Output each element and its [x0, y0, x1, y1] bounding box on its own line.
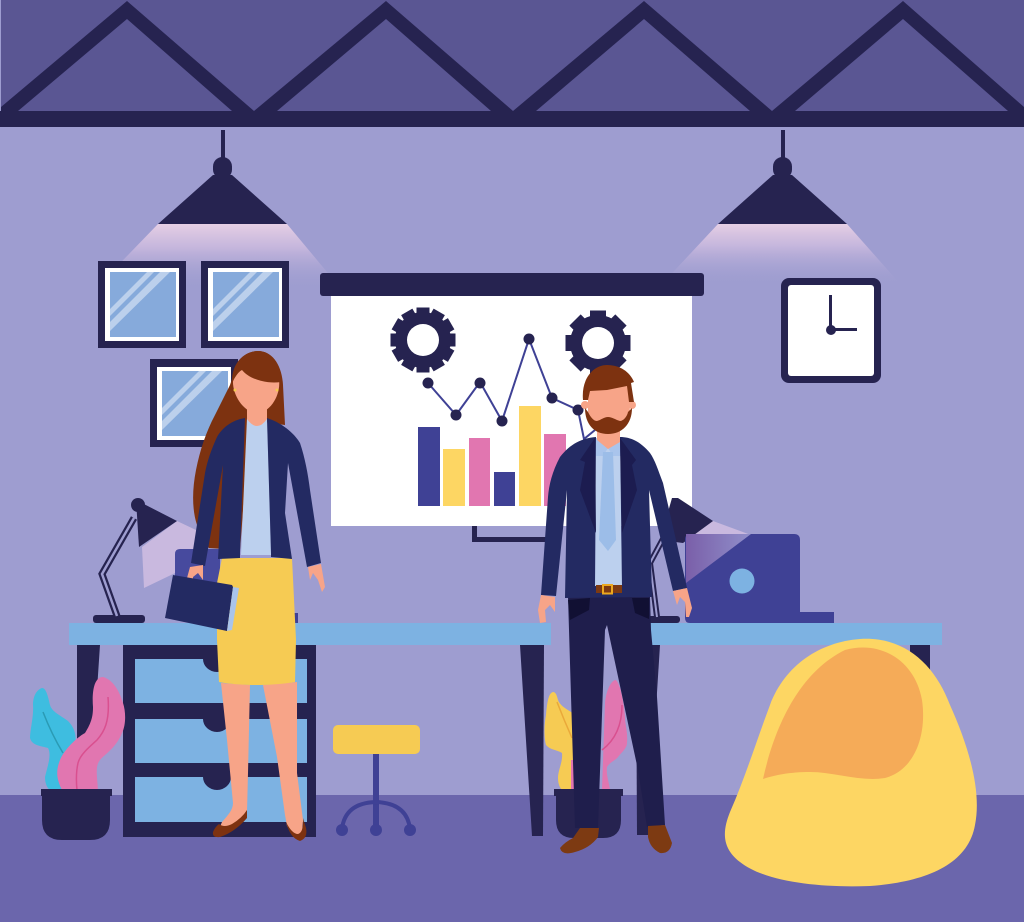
gear: right [566, 310, 630, 376]
drawers [123, 645, 316, 837]
ears [581, 401, 589, 409]
tie [599, 452, 616, 551]
plant: left [30, 677, 125, 840]
shoes [560, 828, 599, 853]
lapels [580, 438, 637, 533]
blouse [241, 418, 271, 555]
hand: right [308, 564, 325, 592]
floor [0, 795, 1024, 922]
earrings [234, 388, 236, 392]
shoes [213, 810, 247, 837]
desk: right [636, 623, 942, 835]
desk: left [69, 623, 551, 836]
plant: right [544, 680, 627, 838]
pockets [568, 598, 649, 620]
ceiling lamp: right [662, 130, 902, 286]
picture frame: top right [201, 261, 289, 348]
neck [597, 425, 620, 449]
woman [165, 351, 325, 841]
face [233, 366, 279, 413]
folder [165, 575, 233, 631]
trousers [568, 597, 665, 828]
belt [596, 585, 622, 593]
roof truss [0, 0, 1024, 127]
skirt [217, 558, 296, 685]
jacket with sleeves [541, 437, 687, 598]
beard [585, 408, 632, 434]
gear: left [390, 308, 456, 372]
bar chart [418, 406, 566, 506]
shirt [595, 438, 622, 586]
ceiling lamp: left [100, 130, 342, 290]
neck [247, 405, 267, 426]
man [538, 365, 692, 853]
hand: left [187, 565, 203, 591]
stool [333, 725, 420, 836]
beanbag [725, 639, 977, 886]
picture frame: lower [150, 359, 238, 447]
hands [538, 595, 555, 623]
wall clock [781, 278, 881, 383]
hair back [193, 351, 285, 550]
jacket and sleeve: left side [191, 418, 245, 566]
projector screen [320, 273, 704, 542]
laptop [685, 534, 834, 623]
picture frame: top left [98, 261, 186, 348]
hair [583, 365, 634, 402]
laptop behind woman [175, 549, 298, 623]
legs [219, 683, 250, 829]
desk lamp: left [93, 498, 196, 623]
line chart [422, 334, 595, 439]
face [588, 384, 630, 430]
desk lamp: right [648, 498, 751, 623]
hair top [232, 351, 281, 384]
collar [596, 438, 621, 456]
jacket and sleeve: right side [267, 418, 321, 567]
